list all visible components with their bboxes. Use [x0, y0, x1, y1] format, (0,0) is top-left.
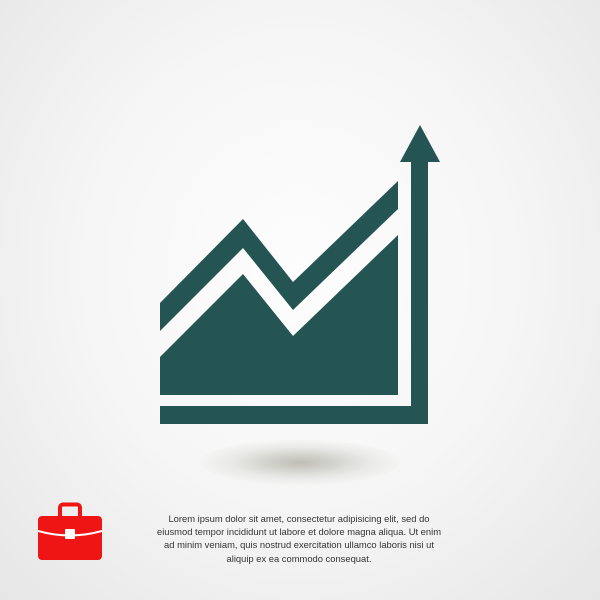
filled area: [160, 235, 398, 395]
axis with arrow: [160, 125, 440, 424]
upper trend band: [160, 181, 398, 331]
text block: Lorem ipsum dolor sit amet, consectetur adipisicing elit, sed do eiusmod tempor incididunt ut labore et dolore magna aliqua. Ut enim ad minim veniam, quis nostrud exercitation ullamco laboris nisi ut aliquip ex ea commodo consequat.: [157, 513, 441, 564]
shadow: [200, 440, 400, 485]
icon: briefcase: [38, 502, 102, 560]
